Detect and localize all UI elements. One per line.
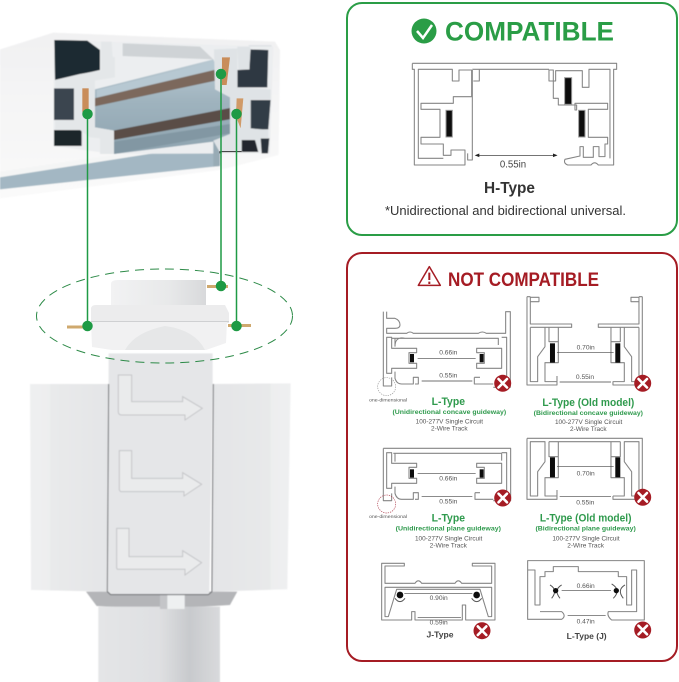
diagrams row 2 and 3 — [369, 438, 644, 626]
photo: adapter body with arrows — [30, 353, 291, 682]
labels row 2 and 3 — [396, 513, 636, 641]
labels row 2 and 3: L-Type (J) — [567, 631, 607, 641]
photo: track rail cross-section — [0, 33, 280, 198]
diagram: L-type old plane: 0.55in — [576, 500, 595, 507]
labels row 2 and 3: (Unidirectional plane guideway) — [396, 526, 501, 533]
diagram: L-type (J) — [528, 561, 644, 626]
photo: track copper contacts — [82, 57, 243, 153]
labels row 1: L-Type (Old model) — [542, 397, 635, 409]
label: H-Type: H-Type — [484, 180, 535, 197]
heading: not compatible: NOT COMPATIBLE — [448, 270, 599, 291]
labels row 2 and 3: 100-277V Single Circuit — [552, 535, 620, 542]
diagram: L-type old concave: 0.55in — [576, 374, 594, 381]
icons: red X badges — [474, 375, 651, 639]
diagram: J-type: 0.59in — [430, 619, 448, 626]
labels row 1: 2-Wire Track — [431, 425, 468, 432]
diagram: L-type unidirectional plane: 0.66in — [439, 475, 458, 482]
heading: compatible: COMPATIBLE — [445, 16, 614, 46]
diagram: L-type (J): 0.66in — [577, 583, 595, 590]
labels row 1: 100-277V Single Circuit — [555, 419, 622, 426]
diagram: L-type old plane — [527, 438, 642, 507]
labels row 1: 2-Wire Track — [570, 426, 607, 433]
diagram: L-type unidirectional plane: 0.55in — [439, 498, 458, 505]
icon: arrow 2 — [119, 451, 202, 496]
panel: compatible — [347, 3, 677, 235]
diagram: J-type — [382, 563, 495, 626]
diagram: L-type old concave: 0.70in — [577, 345, 595, 352]
labels row 2 and 3: J-Type — [426, 629, 454, 639]
diagram: L-type old plane: 0.70in — [577, 470, 595, 477]
diagram: L-type old concave — [527, 297, 642, 385]
right insulator — [213, 45, 272, 153]
diagram: L-type unidirectional concave — [369, 312, 510, 403]
icon: warning triangle — [418, 267, 440, 285]
diagram: L-type unidirectional concave: 0.66in — [439, 350, 458, 357]
icon: arrow 1 — [118, 375, 202, 420]
panel: not compatible — [347, 253, 677, 661]
green connection lines and dashed ellipse — [36, 70, 292, 363]
icon: arrow 3 — [117, 528, 202, 575]
diagram: H-type profile: 0.55in — [500, 160, 526, 171]
labels row 2 and 3: L-Type — [432, 513, 465, 525]
diagrams row 1 — [369, 297, 642, 403]
labels row 2 and 3: 2-Wire Track — [430, 542, 468, 549]
labels row 1: 100-277V Single Circuit — [416, 418, 483, 425]
labels row 2 and 3: (Bidirectional plane guideway) — [535, 526, 636, 533]
left insulator — [55, 42, 115, 154]
diagram: L-type unidirectional plane — [369, 448, 511, 519]
labels row 2 and 3: L-Type (Old model) — [540, 513, 632, 525]
photo: adapter connector head — [67, 280, 251, 350]
note: universal: *Unidirectional and bidirectional universal. — [385, 204, 626, 218]
diagram: L-type unidirectional concave: 0.55in — [439, 372, 458, 379]
icon: green check — [412, 18, 436, 44]
labels row 2 and 3: 100-277V Single Circuit — [415, 535, 482, 542]
diagram: H-type profile — [412, 63, 617, 171]
labels row 2 and 3: 2-Wire Track — [567, 542, 605, 549]
labels row 1 — [392, 396, 643, 433]
diagram: J-type: 0.90in — [430, 595, 448, 602]
labels row 1: L-Type — [432, 396, 465, 408]
diagram: L-type (J): 0.47in — [577, 619, 595, 626]
labels row 1: (Bidirectional concave guideway) — [534, 410, 643, 417]
labels row 1: (Unidirectional concave guideway) — [392, 409, 506, 416]
diagram: L-type unidirectional concave: one-dimensional — [369, 398, 407, 403]
diagram: L-type unidirectional plane: one-dimensional — [369, 514, 407, 519]
